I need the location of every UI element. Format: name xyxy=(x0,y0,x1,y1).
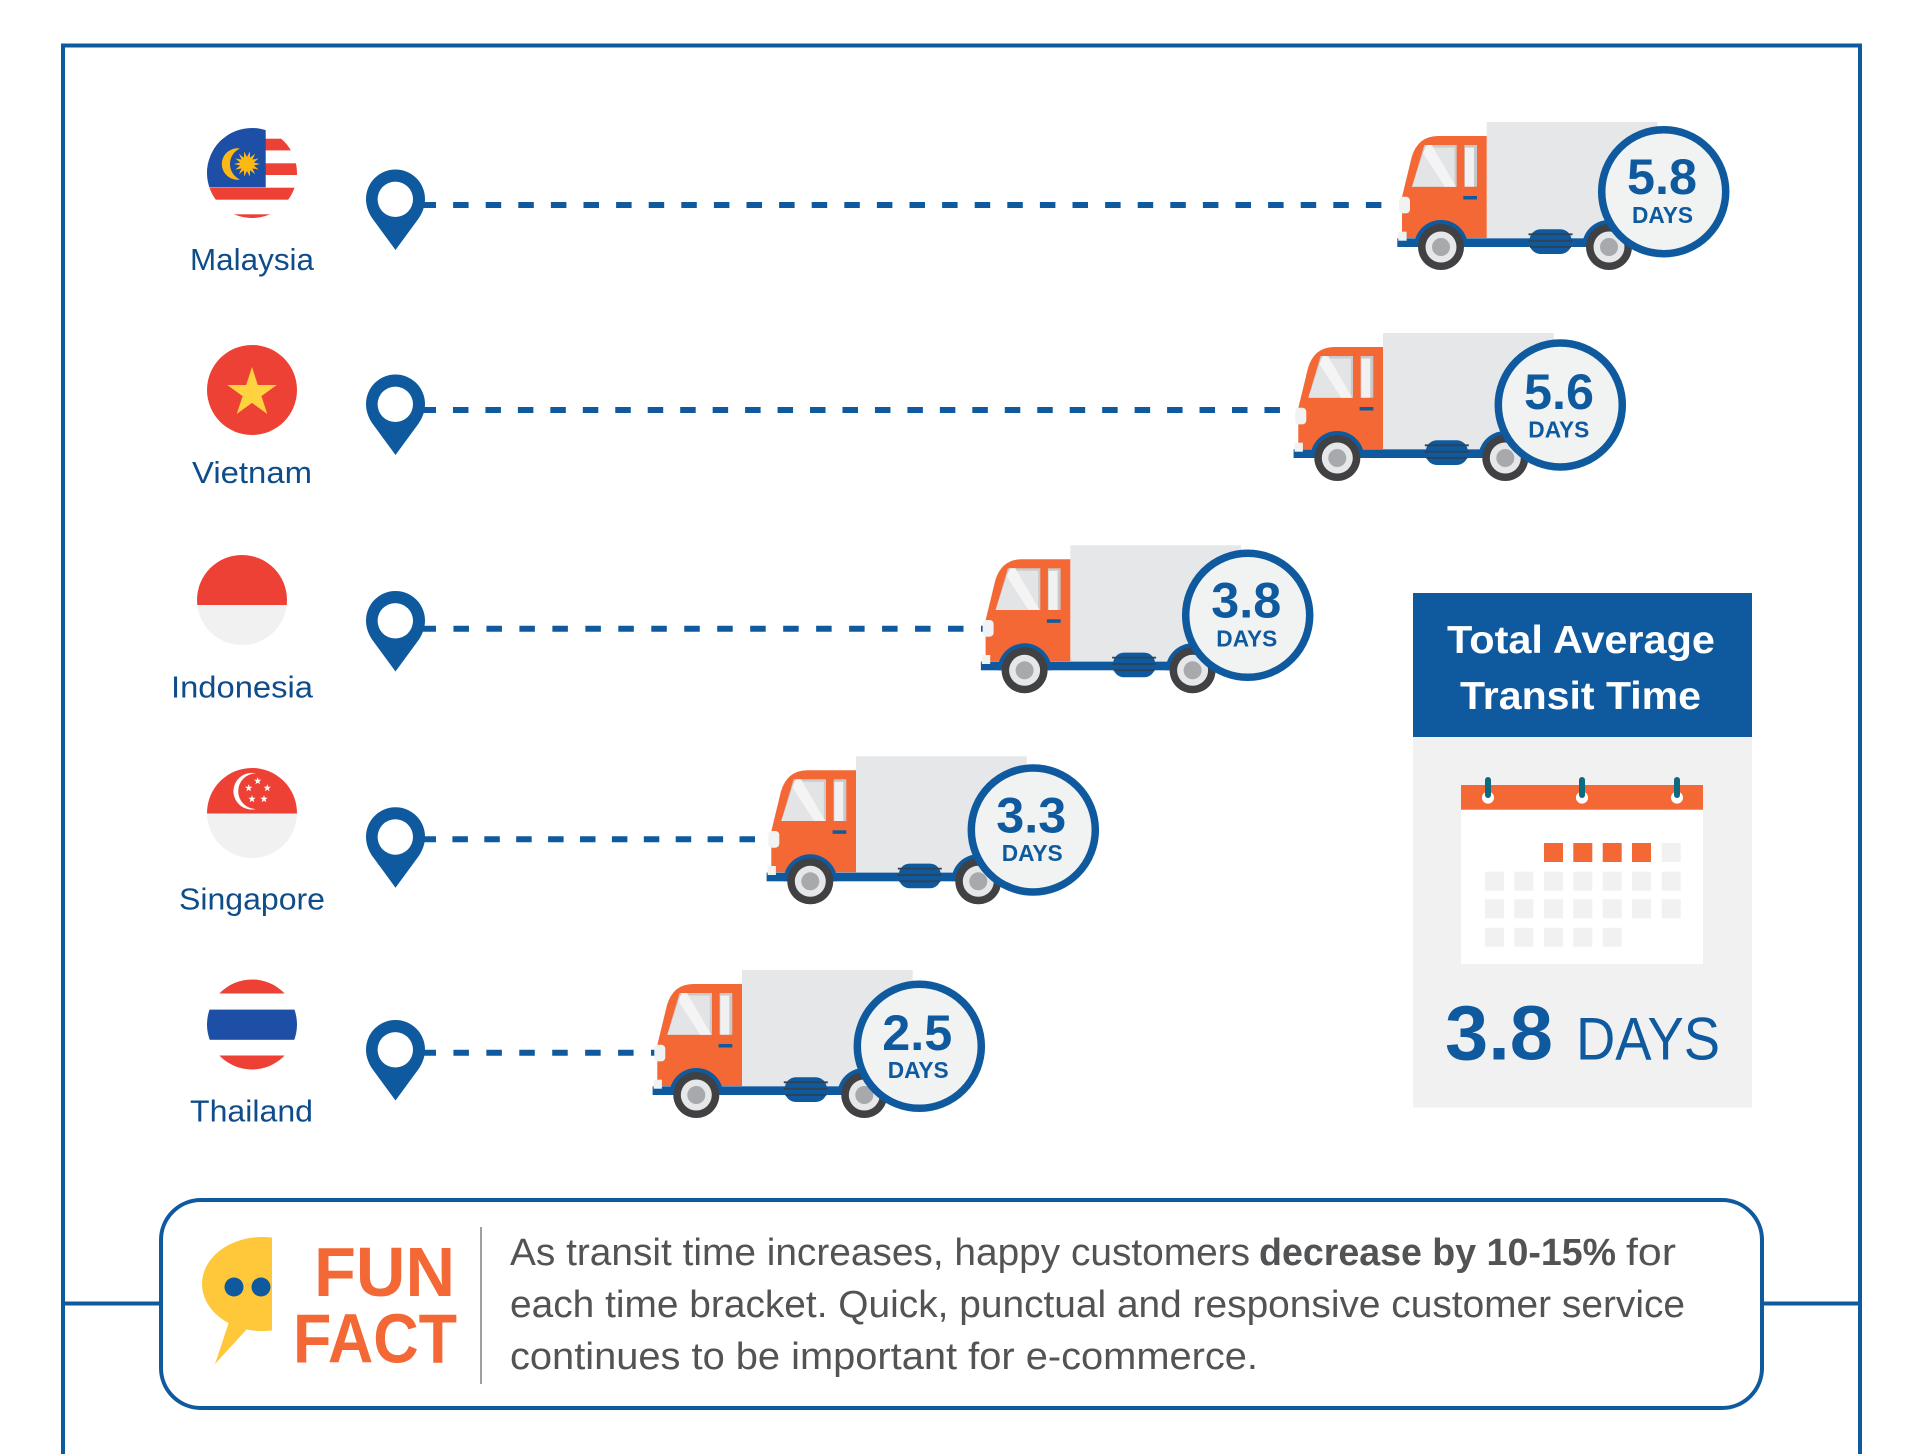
pin icon xyxy=(366,1020,425,1100)
badge: 5.8 days: DAYS xyxy=(1632,202,1693,228)
panel background xyxy=(1413,593,1752,1108)
flag: Singapore xyxy=(207,768,297,859)
flag: Indonesia xyxy=(197,555,287,646)
badge: 3.3 days xyxy=(971,768,1095,892)
heading: fun fact xyxy=(293,1233,457,1378)
badge: 2.5 days: DAYS xyxy=(888,1057,949,1083)
badge: 5.8 days: 5.8 xyxy=(1627,149,1697,205)
panel header xyxy=(1413,593,1752,737)
callout box xyxy=(161,1200,1762,1408)
panel header: Transit Time xyxy=(1460,675,1701,718)
badge: 5.6 days: DAYS xyxy=(1528,416,1589,442)
label: Indonesia: Indonesia xyxy=(171,670,314,704)
pin icon xyxy=(366,374,425,455)
panel: total average transit time xyxy=(1413,593,1752,1108)
label: Singapore: Singapore xyxy=(179,881,325,916)
row: Malaysia xyxy=(190,122,1726,277)
label: Vietnam: Vietnam xyxy=(192,455,312,490)
fun fact text xyxy=(510,1232,1685,1378)
dashed route xyxy=(420,407,1290,413)
badge: 2.5 days: 2.5 xyxy=(882,1005,952,1061)
row: Thailand xyxy=(190,970,981,1129)
badge: 3.8 days xyxy=(1186,553,1310,677)
badge: 3.8 days: 3.8 xyxy=(1211,572,1281,628)
pin icon xyxy=(366,591,425,672)
truck xyxy=(981,545,1241,693)
total value: 3.8 days: DAYS xyxy=(1576,1005,1720,1072)
pin icon xyxy=(366,170,425,250)
dashed route xyxy=(420,626,985,632)
heading: fun fact: FACT xyxy=(293,1300,457,1378)
truck xyxy=(653,970,913,1118)
truck xyxy=(1397,122,1657,270)
badge: 5.6 days xyxy=(1498,343,1622,467)
panel header: Total Average xyxy=(1447,619,1715,662)
fun fact text: for xyxy=(1626,1232,1676,1274)
fun fact text: decrease by 10-15% xyxy=(1259,1232,1616,1274)
fun fact text: each time bracket. Quick, punctual and responsive customer service xyxy=(510,1284,1685,1326)
badge: 5.6 days: 5.6 xyxy=(1524,364,1594,420)
flag: Malaysia xyxy=(207,128,297,218)
icon: calendar xyxy=(1461,777,1703,964)
total value: 3.8 days xyxy=(1445,990,1720,1076)
badge: 3.3 days: 3.3 xyxy=(996,787,1066,843)
pin icon xyxy=(366,807,425,888)
row: Vietnam xyxy=(192,333,1622,490)
callout: fun fact xyxy=(161,1200,1762,1408)
badge: 2.5 days xyxy=(857,984,981,1108)
dashed route xyxy=(420,1050,660,1056)
truck xyxy=(767,756,1027,904)
badge: 3.3 days: DAYS xyxy=(1002,840,1063,866)
label: Thailand: Thailand xyxy=(190,1094,313,1129)
fun fact text: continues to be important for e-commerce. xyxy=(510,1336,1258,1378)
label: Malaysia: Malaysia xyxy=(190,242,315,277)
row: Singapore xyxy=(179,756,1095,916)
dashed route xyxy=(420,836,755,842)
divider xyxy=(480,1227,482,1384)
flag: Vietnam xyxy=(207,345,297,435)
badge: 3.8 days: DAYS xyxy=(1216,625,1277,651)
flag: Thailand xyxy=(207,979,297,1070)
truck xyxy=(1294,333,1554,481)
heading: fun fact: FUN xyxy=(314,1233,455,1311)
badge: 5.8 days xyxy=(1602,130,1726,254)
row: Indonesia xyxy=(171,545,1310,704)
fun fact text: As transit time increases, happy customers xyxy=(510,1232,1250,1274)
icon: speech bubble xyxy=(202,1237,272,1364)
dashed route xyxy=(420,202,1382,208)
total value: 3.8 days: 3.8 xyxy=(1445,990,1553,1076)
